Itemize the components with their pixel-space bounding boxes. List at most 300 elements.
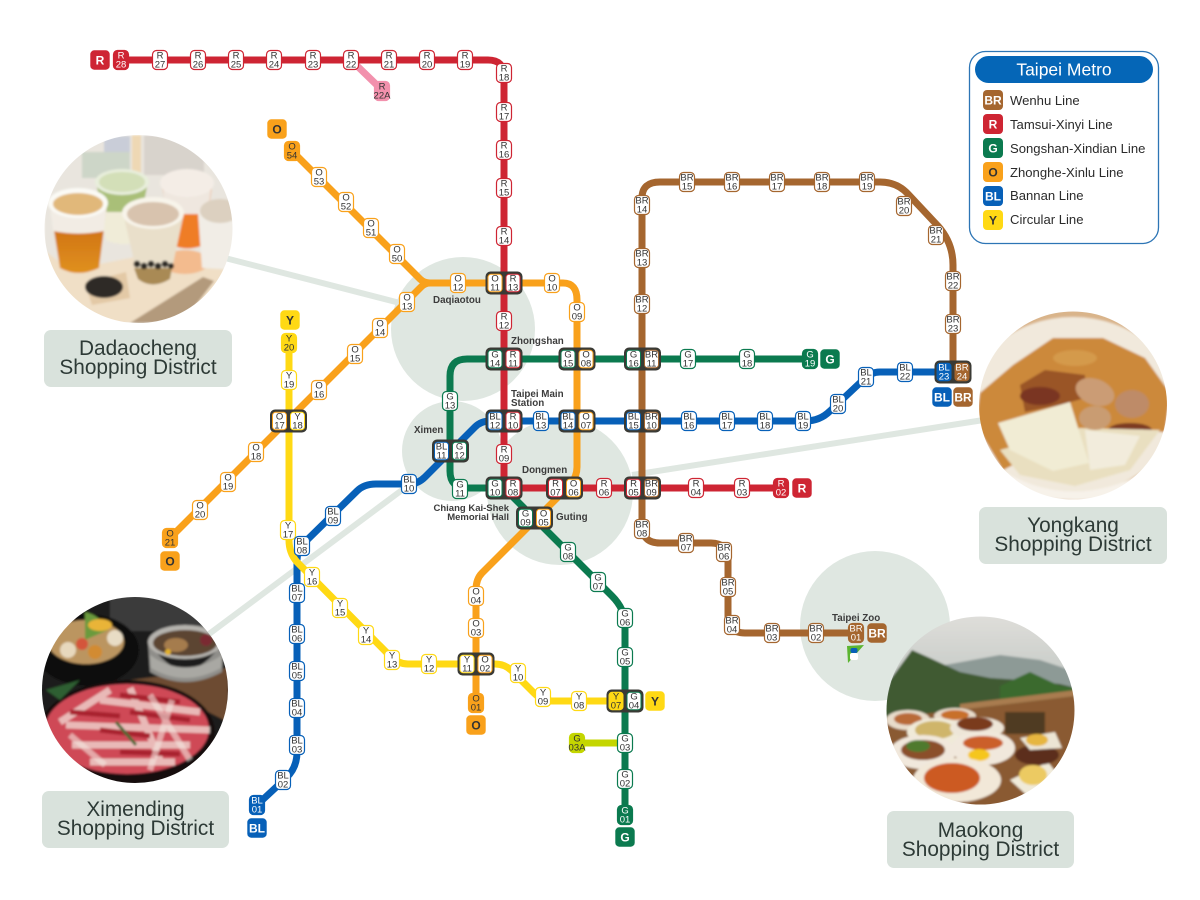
stations: brown line (634, 172, 960, 644)
stations: red line: 17 (499, 112, 509, 122)
stations: brown line: 03 (767, 632, 777, 644)
stations: green line: 06 (620, 618, 630, 628)
line terminal badges: O (165, 554, 175, 568)
interchange stations: R (510, 350, 517, 360)
stations: brown line: BR (717, 542, 731, 554)
legend names: Bannan Line (1010, 188, 1084, 203)
interchange stations: G (522, 508, 529, 520)
stations: yellow line: Y (286, 370, 293, 382)
stations: brown line: 20 (899, 206, 909, 216)
stations: orange line: 18 (251, 452, 261, 462)
stations: yellow line: 20 (284, 342, 294, 354)
stations: red line: R (501, 444, 508, 456)
stations: red line: 18 (499, 72, 509, 84)
line terminal badges: O (471, 718, 481, 732)
stations: blue line (250, 362, 912, 816)
interchange stations: BR (955, 362, 969, 374)
stations: green line: G (621, 806, 629, 816)
stations: blue line: 17 (722, 420, 732, 432)
interchange stations: BL (489, 412, 501, 422)
station name labels: Daqiaotou (433, 295, 481, 306)
stations: yellow line: Y (389, 650, 396, 662)
stations: red line: R (379, 82, 386, 92)
stations: brown line: BR (815, 172, 829, 184)
metro line: Tamsui-Xinyi (red) (121, 60, 781, 488)
stations: green line: 01 (620, 814, 630, 826)
stations: yellow line: Y (363, 626, 370, 636)
metro line: Wenhu (brown) (642, 182, 953, 633)
photo: Yongkang shaved ice (979, 312, 1167, 500)
stations: orange line: O (472, 618, 480, 630)
stations: red line: 02 (776, 488, 786, 498)
stations: green line (442, 350, 818, 826)
stations: yellow line: 09 (538, 696, 548, 708)
label: Yongkang Shopping District: Shopping District (994, 533, 1152, 556)
stations: blue line: BL (291, 698, 303, 710)
stations: red line: 25 (231, 60, 241, 70)
stations: blue line: 05 (292, 670, 302, 682)
stations: orange line: 04 (471, 596, 481, 606)
interchange stations: O (481, 654, 489, 666)
interchange stations: 12 (490, 420, 500, 432)
line terminal badges (90, 50, 973, 847)
stations: brown line: BR (679, 534, 693, 544)
stations: red line: 12 (499, 320, 509, 332)
stations: yellow line: Y (576, 692, 583, 702)
interchange stations: BL (562, 412, 574, 422)
stations: brown line: BR (635, 294, 649, 306)
stations: red line: 28 (116, 60, 126, 70)
stations: red line: R (462, 50, 469, 62)
stations: orange line: 09 (572, 312, 582, 322)
interchange stations: R (510, 274, 517, 284)
stations: brown line: 05 (723, 586, 733, 598)
stations: yellow line (280, 334, 586, 712)
stations: orange line: 10 (547, 282, 557, 294)
stations: yellow line: 08 (574, 700, 584, 712)
stations: blue line: 08 (297, 546, 307, 556)
stations: brown line: BR (946, 272, 960, 282)
stations: blue line: 13 (536, 420, 546, 432)
interchange stations: 24 (957, 372, 967, 382)
line terminal badges: R (798, 482, 807, 496)
stations: green line: 18 (742, 358, 752, 370)
stations: green line: G (621, 608, 629, 620)
stations: red line: 15 (499, 188, 509, 198)
stations: blue line: BL (327, 506, 339, 518)
legend rows: O (988, 166, 998, 180)
interchange stations: 17 (274, 420, 285, 432)
interchange stations: Y (464, 654, 471, 666)
stations: yellow line: Y (337, 598, 344, 610)
stations: orange line: 20 (195, 510, 205, 520)
stations: red line: R (601, 478, 608, 490)
stations: blue line: 16 (684, 420, 694, 432)
interchange stations: 18 (292, 420, 303, 432)
stations: orange line: O (166, 528, 174, 540)
stations: blue line: 10 (404, 484, 414, 494)
label: Dadaocheng Shopping District: Shopping District (59, 356, 217, 379)
interchange stations: G (630, 692, 638, 702)
stations: red line: R (271, 50, 278, 62)
stations: green line: 05 (620, 656, 630, 668)
stations: red line: 04 (691, 488, 701, 498)
stations: yellow line: 13 (387, 660, 397, 670)
stations: brown line: 19 (862, 182, 872, 192)
stations: red line: R (778, 478, 785, 490)
stations: green line: 03A (569, 742, 586, 754)
station name labels: Chiang Kai-Shek (434, 503, 510, 514)
stations: yellow line: Y (309, 568, 316, 578)
stations: blue line: 03 (292, 744, 302, 756)
stations: blue line: BL (296, 536, 308, 548)
stations: green line: 13 (445, 400, 455, 412)
stations: blue line: BL (291, 584, 303, 594)
interchange stations: 07 (581, 420, 591, 432)
stations: red line: R (501, 226, 508, 238)
interchange stations: 10 (646, 420, 657, 432)
legend names (1010, 93, 1145, 227)
stations: red line: R (501, 140, 508, 152)
stations: red line: 16 (499, 150, 509, 160)
stations: red line: 22 (346, 60, 356, 70)
stations: blue line: BL (683, 412, 695, 422)
legend rows: BL (985, 190, 1001, 204)
stations: blue line: BL (251, 796, 263, 806)
station name labels: Zhongshan (511, 336, 564, 347)
stations: orange line: 12 (453, 282, 463, 294)
stations: yellow line: Y (286, 334, 293, 344)
stations: orange line: O (403, 292, 411, 304)
stations: brown line: 01 (851, 632, 861, 644)
stations: orange line: O (288, 142, 296, 152)
stations: brown line: 21 (931, 234, 941, 246)
line terminal badges: Y (651, 694, 659, 708)
interchange stations: 11 (490, 282, 500, 294)
line terminal badges: O (272, 122, 282, 136)
stations: green line: G (806, 350, 814, 360)
stations: brown line: BR (765, 624, 779, 634)
stations: orange line: O (472, 694, 480, 704)
stations: orange line: 01 (471, 702, 481, 714)
stations: brown line: BR (725, 616, 739, 626)
legend title: Taipei Metro (1016, 60, 1112, 80)
legend rows (983, 90, 1003, 230)
legend rows: G (988, 142, 998, 156)
interchange stations: G (456, 442, 463, 452)
stations: blue line: 07 (292, 592, 302, 604)
stations: orange line: O (351, 344, 359, 356)
interchange stations: 08 (508, 488, 518, 498)
legend names: Wenhu Line (1010, 93, 1080, 108)
stations: blue line: BL (403, 474, 415, 486)
stations: blue line: 02 (278, 780, 288, 790)
stations: orange line: 19 (223, 482, 233, 492)
stations: red line: R (501, 312, 508, 322)
interchange stations: 15 (563, 358, 573, 370)
legend rows: BR (984, 94, 1002, 108)
interchange stations: 07 (550, 488, 561, 498)
stations: red line: R (501, 102, 508, 114)
stations: blue line: 09 (328, 516, 338, 526)
interchange stations: 09 (646, 488, 657, 498)
interchange stations: G (630, 350, 637, 360)
line terminal badges: BR (868, 626, 886, 640)
interchange stations: 05 (628, 488, 639, 498)
station name labels: Dongmen (522, 465, 567, 476)
stations: orange line: 14 (375, 328, 385, 338)
line terminal badges: G (620, 830, 630, 844)
interchange stations: 16 (628, 358, 639, 370)
stations: green line: G (621, 648, 629, 658)
stations: red line: 14 (499, 236, 509, 246)
stations: red line: 27 (155, 60, 165, 70)
stations: orange line: 50 (392, 254, 402, 264)
photo: Maokong mountain view dining (885, 615, 1077, 810)
stations: red line: 03 (737, 488, 747, 498)
stations: green line: G (456, 480, 464, 490)
stations: yellow line: Y (426, 654, 433, 666)
stations: orange line: O (315, 380, 323, 392)
stations: green line: G (564, 542, 572, 554)
stations: blue line: BL (832, 394, 844, 406)
station name labels: Ximen (414, 425, 443, 436)
stations: orange line: O (376, 318, 384, 330)
stations: brown line: BR (635, 248, 649, 260)
stations: yellow line: 16 (307, 576, 317, 588)
icon: gondola (847, 645, 864, 663)
interchange stations: 12 (454, 450, 465, 462)
stations: brown line: 02 (811, 632, 821, 644)
legend names: Zhonghe-Xinlu Line (1010, 165, 1124, 180)
label: Dadaocheng Shopping District (44, 330, 232, 387)
interchange stations: G (491, 478, 499, 490)
stations: blue line: BL (277, 770, 289, 782)
stations: green line: 02 (620, 778, 630, 790)
stations: orange line: O (548, 274, 556, 284)
stations: brown line: BR (770, 172, 784, 184)
stations: red line: 22A (374, 90, 391, 102)
stations: red line: 21 (384, 60, 394, 70)
stations: brown line: 15 (682, 182, 692, 192)
stations: brown line: BR (897, 196, 911, 208)
stations: brown line: BR (860, 172, 874, 184)
stations: orange line: O (224, 472, 232, 484)
stations: blue line: BL (291, 736, 303, 746)
interchange stations: G (564, 350, 572, 360)
stations: red line: R (348, 50, 355, 62)
interchange stations: O (276, 412, 283, 422)
stations: brown line: BR (809, 624, 823, 634)
stations: green line: 08 (563, 552, 573, 562)
stations: brown line: 17 (772, 182, 782, 192)
stations: orange line: O (252, 442, 260, 454)
stations: red line: R (157, 50, 164, 62)
stations: yellow line: 14 (361, 634, 371, 646)
stations: red line: 19 (460, 60, 470, 70)
stations: orange line: O (573, 302, 581, 314)
stations: yellow line: Y (285, 520, 292, 532)
stations: green line: G (621, 770, 629, 780)
stations: blue line: BL (721, 412, 733, 422)
interchange stations: R (510, 478, 517, 490)
stations: brown line: BR (721, 578, 735, 588)
station name labels: Guting (556, 512, 588, 523)
stations: orange line: O (454, 274, 462, 284)
label: Ximending Shopping District: Ximending (86, 798, 185, 821)
stations: blue line: BL (899, 362, 911, 374)
stations: orange line: O (472, 586, 480, 598)
stations: orange line: 51 (366, 228, 376, 238)
stations: blue line: 06 (292, 634, 302, 644)
interchange stations: 08 (581, 358, 591, 370)
stations: orange line: O (367, 218, 375, 230)
stations: red line: R (195, 50, 202, 62)
metro line: Circular (yellow) (289, 343, 625, 701)
interchange stations: O (491, 274, 499, 284)
stations: yellow line: 15 (335, 608, 345, 618)
stations: orange line: 13 (402, 302, 412, 312)
stations: brown line: BR (946, 314, 960, 326)
stations: orange line: 16 (314, 390, 324, 400)
label: Ximending Shopping District: Shopping District (57, 817, 214, 840)
interchange stations: BL (938, 362, 950, 374)
stations: brown line: BR (849, 624, 863, 634)
label: Dadaocheng Shopping District: Dadaocheng (79, 337, 197, 360)
interchange stations: 23 (939, 372, 949, 382)
label: Maokong Shopping District (887, 811, 1074, 868)
stations: orange line: 15 (350, 354, 360, 364)
stations: brown line: 04 (727, 624, 737, 636)
stations: red line: 24 (269, 60, 279, 70)
stations: yellow line: 17 (283, 530, 293, 540)
stations: orange line: O (196, 500, 204, 512)
stations: brown line: 08 (637, 528, 647, 540)
interchange stations: 10 (490, 488, 500, 498)
stations: brown line: 06 (719, 552, 729, 562)
label: Yongkang Shopping District (979, 507, 1167, 564)
label: Ximending Shopping District (42, 791, 229, 848)
stations: blue line: BL (797, 412, 809, 422)
stations: blue line: BL (759, 412, 771, 422)
stations: orange line: 03 (471, 628, 481, 638)
stations: green line: G (743, 350, 751, 360)
photo: Ximending hot pot (35, 595, 230, 785)
stations: yellow line: Y (515, 664, 522, 674)
interchange stations: Y (613, 692, 620, 702)
interchange stations: BL (628, 412, 639, 422)
stations: blue line: 19 (798, 420, 808, 432)
stations: red line: R (501, 178, 508, 190)
stations: red line: R (424, 50, 431, 62)
stations: green line: G (594, 572, 602, 584)
stations: green line: 11 (455, 488, 465, 500)
interchange stations: R (630, 478, 637, 490)
stations: blue line: 21 (861, 376, 871, 388)
stations: orange line: 54 (287, 150, 297, 162)
stations: red line: R (310, 50, 317, 62)
stations: green line: G (684, 350, 692, 360)
interchange stations: 14 (563, 420, 573, 432)
legend names: Tamsui-Xinyi Line (1010, 117, 1113, 132)
interchange stations: 11 (437, 450, 446, 462)
stations: orange line: O (342, 192, 350, 204)
stations: red line: 09 (499, 454, 509, 464)
stations: blue line: BL (291, 624, 303, 636)
area circles and connector lines (205, 257, 990, 701)
stations: green line: G (446, 392, 454, 402)
stations: red line (114, 50, 788, 498)
stations: orange line (162, 142, 584, 714)
stations: blue line: BL (535, 412, 547, 422)
stations: red line: R (501, 64, 508, 74)
stations: green line: G (621, 734, 629, 744)
station name labels: Memorial Hall (447, 512, 509, 523)
stations: brown line: BR (929, 226, 943, 236)
stations: red line: 26 (193, 60, 203, 70)
interchange stations: O (582, 412, 590, 422)
station name labels: Station (511, 398, 544, 409)
label: Yongkang Shopping District: Yongkang (1027, 514, 1119, 537)
interchange stations: BL (436, 442, 447, 452)
stations: green line: G (573, 734, 581, 744)
interchange stations: 13 (508, 282, 518, 294)
legend rows: Y (989, 214, 997, 228)
interchange stations: 04 (629, 700, 639, 712)
metro line: Bannan (blue) (257, 372, 953, 805)
stations: orange line: 52 (341, 202, 351, 212)
interchange stations: R (510, 412, 517, 422)
line terminal badges: G (825, 352, 835, 366)
legend title (975, 56, 1153, 83)
legend names: Circular Line (1010, 212, 1084, 227)
stations: green line: 17 (683, 358, 693, 370)
station name labels: Taipei Main (511, 389, 564, 400)
label: Maokong Shopping District: Maokong (938, 819, 1023, 842)
stations: blue line: 01 (252, 804, 262, 816)
stations: brown line: 22 (948, 280, 958, 292)
stations: yellow line: 10 (513, 672, 523, 684)
interchange stations: 15 (628, 420, 639, 432)
interchange stations (270, 272, 972, 712)
interchange stations: 06 (568, 488, 579, 498)
line terminal badges: Y (286, 314, 294, 328)
stations: red line: R (739, 478, 746, 490)
interchange stations: 10 (508, 420, 518, 432)
stations: brown line: BR (635, 520, 649, 530)
interchange stations: BR (645, 412, 658, 422)
interchange stations: 05 (538, 518, 549, 528)
stations: blue line: 04 (292, 708, 302, 718)
stations: brown line: BR (725, 172, 739, 184)
stations: yellow line: 12 (424, 664, 434, 674)
interchange stations: Y (294, 412, 301, 422)
stations: orange line: 53 (314, 176, 324, 188)
stations: orange line: 21 (165, 538, 175, 548)
stations: orange line: O (315, 168, 323, 178)
stations: red line: 20 (422, 60, 432, 70)
station name labels (414, 295, 880, 624)
label: Maokong Shopping District: Shopping District (902, 838, 1059, 861)
line terminal badges: BL (249, 822, 265, 836)
metro line: Songshan-Xindian (green) (450, 359, 810, 815)
interchange stations: O (570, 478, 577, 490)
legend names: Songshan-Xindian Line (1010, 141, 1145, 156)
stations: brown line: 16 (727, 182, 737, 192)
stations: green line: 03 (620, 742, 630, 754)
line terminal badges: BR (954, 390, 972, 404)
stations: brown line: BR (680, 172, 694, 184)
